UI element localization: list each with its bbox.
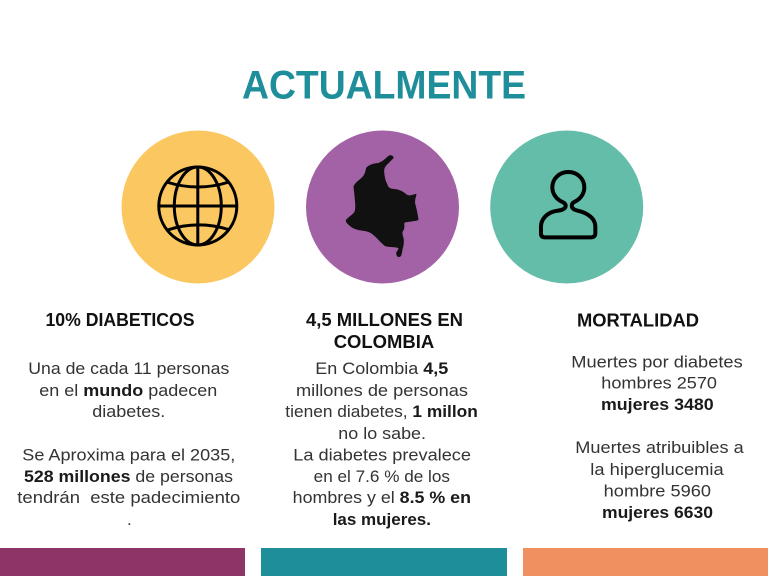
panel: mortality	[490, 130, 768, 576]
text block: diabetes deaths: Muertes por diabetes	[571, 352, 743, 372]
text block: 2035 projection: Se Aproxima para el 2035,	[22, 446, 235, 464]
icon: globe	[122, 130, 274, 284]
title: ACTUALMENTE	[242, 64, 526, 108]
text block: world prevalence	[28, 359, 229, 421]
text block: diabetes deaths	[571, 352, 743, 414]
text block: hyperglycemia deaths: hombre 5960	[604, 482, 711, 500]
text block: 2035 projection: .	[127, 510, 132, 529]
panel: world diabetics	[0, 130, 274, 576]
text block: Colombia figures: no lo sabe.	[338, 424, 426, 443]
text block: hyperglycemia deaths	[575, 438, 744, 522]
text block: hyperglycemia deaths: mujeres 6630	[602, 503, 713, 522]
heading: mortalidad: MORTALIDAD	[577, 310, 699, 330]
text block: Colombia figures: En Colombia 4,5	[315, 359, 448, 378]
bar: teal	[261, 548, 507, 576]
text block: diabetes deaths: mujeres 3480	[601, 395, 714, 414]
text block: world prevalence: diabetes.	[92, 402, 165, 421]
text block: Colombia figures	[285, 359, 478, 529]
icon: person	[490, 130, 643, 284]
text block: world prevalence: en el mundo padecen	[39, 381, 217, 400]
text block: Colombia figures: en el 7.6 % de los	[314, 467, 450, 486]
text block: Colombia figures: las mujeres.	[333, 510, 431, 529]
text block: Colombia figures: La diabetes prevalece	[293, 446, 471, 464]
bar: plum	[0, 548, 245, 576]
heading: 4,5 millones en Colombia: 4,5 MILLONES EN	[306, 309, 463, 330]
text block: hyperglycemia deaths: la hiperglucemia	[590, 460, 724, 479]
text block: Colombia figures: tienen diabetes, 1 millon	[285, 402, 478, 421]
text block: 2035 projection	[17, 446, 240, 529]
text block: Colombia figures: millones de personas	[296, 381, 468, 400]
text block: diabetes deaths: hombres 2570	[601, 374, 717, 392]
text block: 2035 projection: 528 millones de personas	[24, 467, 233, 486]
text block: hyperglycemia deaths: Muertes atribuibles a	[575, 438, 744, 457]
text block: world prevalence: Una de cada 11 personas	[28, 359, 229, 378]
text block: Colombia figures: hombres y el 8.5 % en	[293, 488, 471, 507]
heading: 4,5 millones en Colombia	[306, 309, 463, 352]
icon: map of Colombia	[306, 130, 459, 284]
bar: orange	[523, 548, 768, 576]
text block: 2035 projection: tendrán este padecimiento	[17, 488, 240, 507]
heading: 4,5 millones en Colombia: COLOMBIA	[334, 331, 434, 352]
panel: colombia	[261, 130, 507, 576]
heading: 10% diabeticos: 10% DIABETICOS	[46, 309, 194, 330]
